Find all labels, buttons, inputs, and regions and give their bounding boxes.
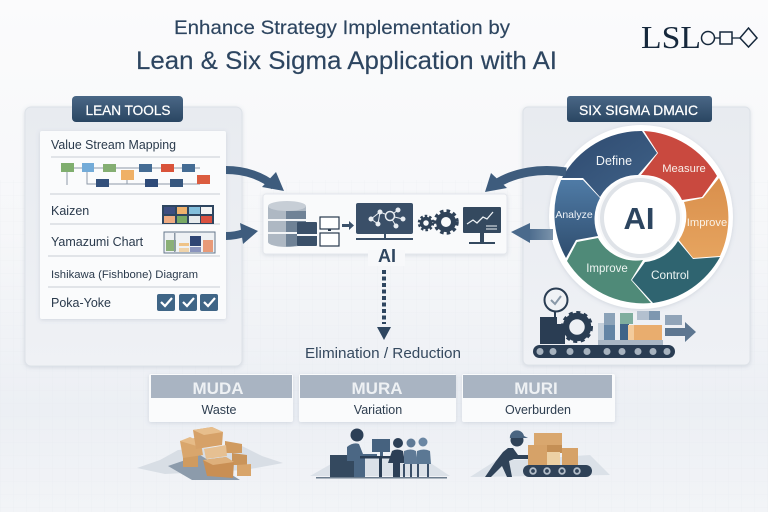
yamazumi chart: Yamazumi Chart (51, 235, 144, 249)
segment: improve orange: Improve (687, 217, 727, 229)
icon: gears (419, 211, 457, 233)
poka-yoke: Poka-Yoke (51, 296, 111, 310)
segment: define (562, 131, 657, 197)
segment: control: Control (651, 268, 689, 282)
card: mura (299, 374, 456, 422)
lean tools label: LEAN TOOLS (86, 102, 170, 118)
panel: AI process (263, 194, 507, 254)
icon: neural network monitor (356, 203, 413, 240)
segment: define: Define (596, 154, 632, 168)
ishikawa: Ishikawa (Fishbone) Diagram (51, 269, 198, 281)
title (136, 17, 557, 75)
icon: data blocks (297, 217, 339, 246)
arrow: dmaic to AI bottom (511, 223, 553, 243)
arrow: dashed down (377, 270, 391, 340)
segment: measure: Measure (662, 163, 706, 175)
card: muri (462, 374, 615, 422)
segment: improve green: Improve (586, 263, 628, 275)
segment: analyze: Analyze (555, 209, 593, 221)
card: muri: MURI (514, 379, 558, 398)
panel: six sigma dmaic (523, 96, 750, 365)
card: mura: Variation (354, 403, 402, 417)
wheel centre: AI (599, 177, 681, 259)
segment: measure (641, 131, 717, 200)
card: muda: MUDA (192, 379, 244, 398)
logo: LSL (641, 19, 757, 55)
dmaic wheel (549, 125, 733, 309)
lean tools label (72, 96, 183, 122)
arrow: lean to AI top (226, 170, 284, 191)
segment: improve orange (679, 178, 728, 258)
title: Enhance Strategy Implementation by (174, 17, 510, 39)
poka-yoke (51, 294, 218, 311)
segment: improve green (567, 238, 651, 303)
arrow: dmaic to AI top (485, 170, 566, 192)
kaizen (51, 204, 214, 224)
segment: analyze (554, 180, 600, 258)
six sigma label (567, 96, 712, 122)
icon: waste boxes (137, 427, 283, 480)
yamazumi chart (51, 232, 215, 253)
text: elimination / reduction: Elimination / Reduction (305, 346, 461, 362)
card: muri: Overburden (505, 403, 571, 417)
card: muda: Waste (202, 403, 237, 417)
kaizen: Kaizen (51, 204, 89, 218)
lean tools card (40, 131, 226, 319)
value stream mapping (51, 138, 210, 187)
logo: LSL: LSL (641, 19, 701, 55)
segment: control (632, 241, 720, 303)
card: mura: MURA (352, 379, 402, 398)
AI label: AI (378, 246, 396, 266)
title: Lean & Six Sigma Application with AI (136, 47, 557, 75)
icon: team at table (310, 428, 450, 478)
six sigma label: SIX SIGMA DMAIC (579, 102, 698, 118)
value stream mapping: Value Stream Mapping (51, 138, 176, 152)
panel: lean tools (25, 96, 242, 366)
icon: chart monitor (463, 207, 501, 244)
icon: worker pushing boxes (470, 430, 610, 477)
icon: small arrow (342, 221, 354, 230)
card: muda (149, 374, 293, 422)
AI label (368, 246, 405, 266)
wheel centre: AI: AI (624, 201, 654, 236)
icon: factory conveyor (533, 288, 696, 358)
icon: database (268, 201, 306, 247)
arrow: lean to AI bottom (226, 223, 258, 244)
